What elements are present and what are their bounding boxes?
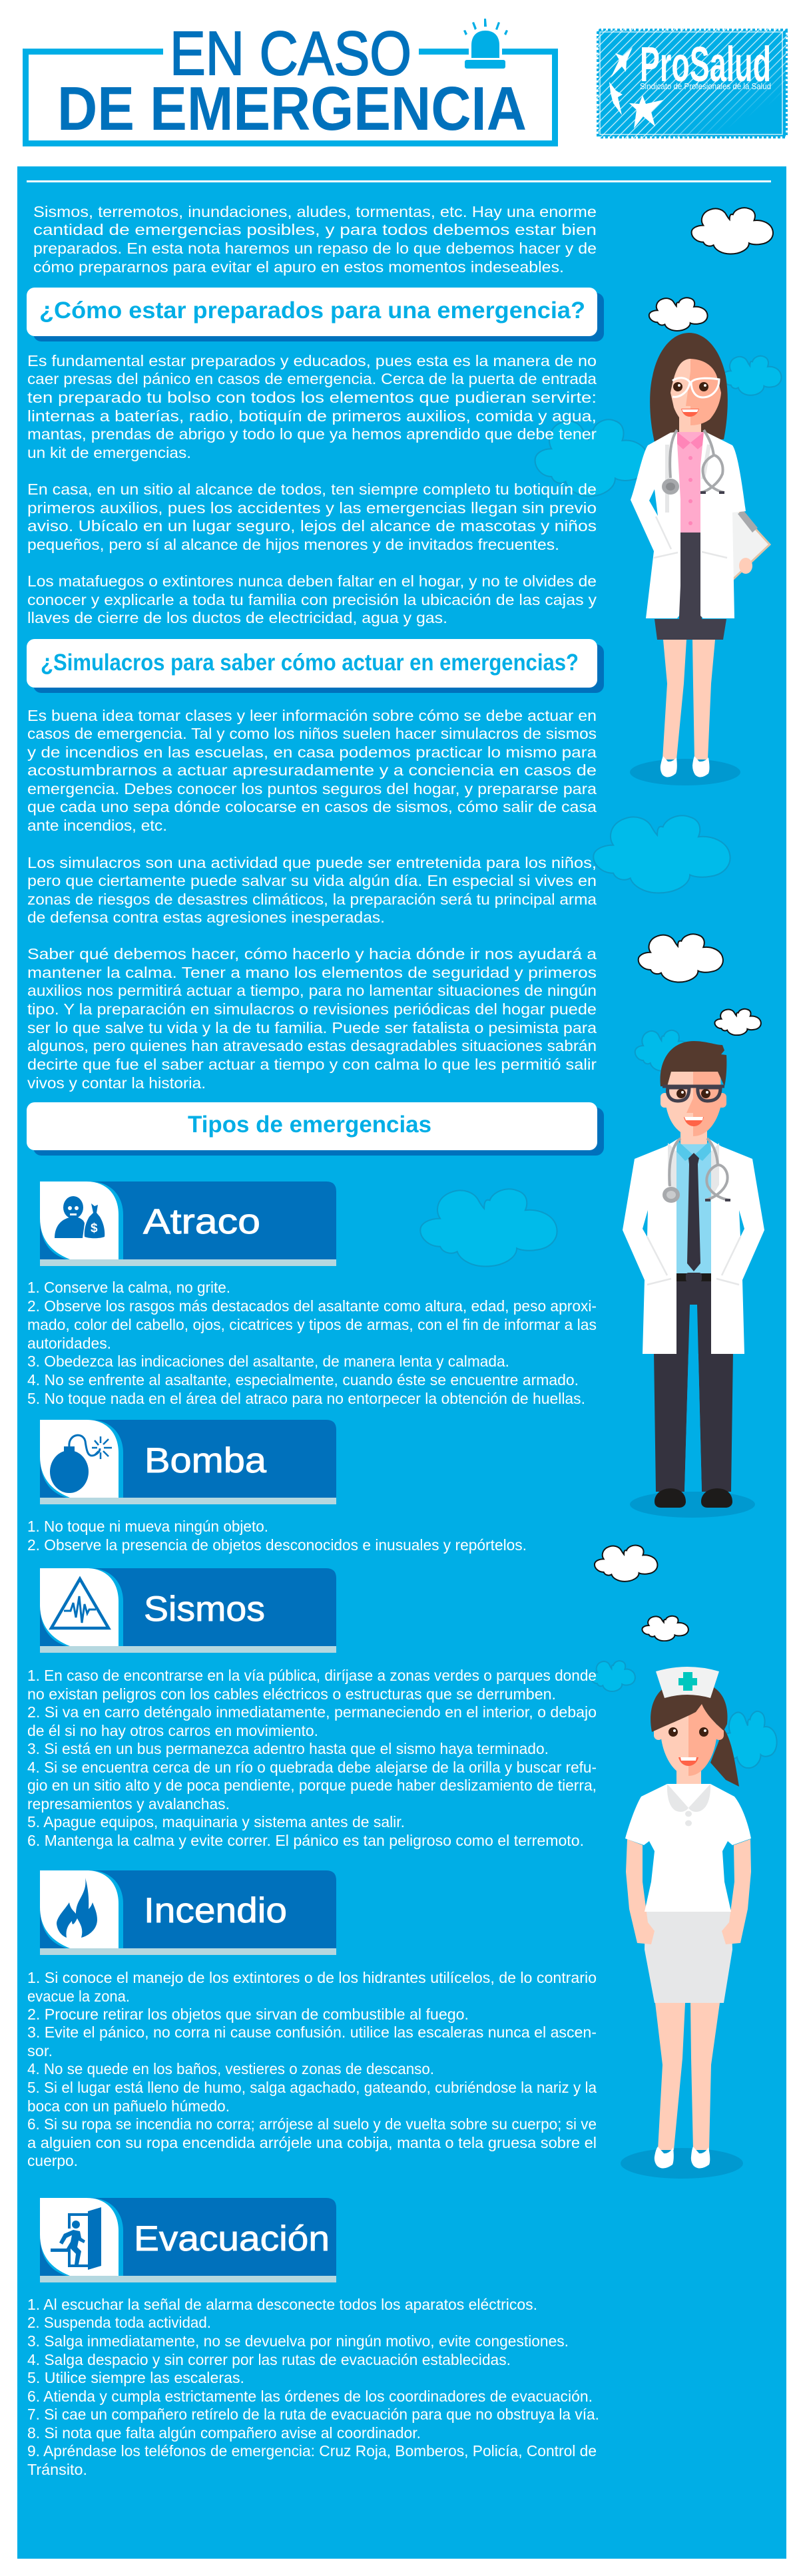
list: evacuacion: 4. Salga despacio y sin correr por las rutas de evacuación establecidas. (27, 2351, 511, 2368)
text block: simulacros paragraph 3: Saber qué debemos hacer, cómo hacerlo y hacia dónde ir nos ayudará a (27, 945, 597, 963)
list: incendio: evacue la zona. (27, 1988, 130, 2005)
text block: preparados paragraph 3: llaves de cierre de los ductos de electricidad, agua y gas. (27, 609, 447, 626)
cloud: blue beside atraco (420, 1189, 557, 1267)
text block: intro (33, 203, 597, 276)
list: evacuacion: 6. Atienda y cumpla estrictamente las órdenes de los coordinadores de evacuación. (27, 2388, 593, 2405)
list: evacuacion: 5. Utilice siempre las escaleras. (27, 2369, 244, 2386)
list: incendio: 2. Procure retirar los objetos que sirvan de combustible al fuego. (27, 2006, 469, 2023)
text block: preparados paragraph 1 (27, 352, 597, 461)
cloud: white small (714, 1009, 761, 1035)
list: evacuacion: 9. Apréndase los teléfonos de emergencia: Cruz Roja, Bomberos, Policía, Control de (27, 2442, 597, 2460)
text block: preparados paragraph 1: un kit de emergencias. (27, 444, 191, 461)
text block: simulacros paragraph 3: algunos, pero quienes han atravesado estas desagradables situaciones sabrán (27, 1037, 597, 1054)
text block: preparados paragraph 1: mantas, prendas de abrigo y todo lo que ya hemos aprendido que debe tener (27, 425, 597, 443)
text block: simulacros paragraph 3: ser lo que salve tu vida y la de tu familia. Puede ser fatalista o pesimista para (27, 1019, 597, 1036)
heading: tipos de emergencias (27, 1102, 604, 1156)
text block: simulacros paragraph 3: tipo. Y la preparación en simulacros o revisiones periódicas del hogar puede (27, 1000, 597, 1018)
text block: preparados paragraph 3: conocer y explicarle a toda tu familia con precisión la ubicación de las cajas y (27, 591, 597, 608)
cloud: white above woman (649, 298, 708, 331)
text block: simulacros paragraph 1: casos de emergencia. Tal y como los niños suelen hacer simulacros de sismos (27, 725, 597, 742)
text block: intro: preparados. En esta nota haremos un repaso de lo que debemos hacer y de (33, 240, 597, 257)
text block: intro: Sismos, terremotos, inundaciones, aludes, tormentas, etc. Hay una enorme (33, 203, 597, 220)
banner: bomba (40, 1420, 336, 1504)
heading: simulacros (27, 639, 604, 693)
list: sismos: no existan peligros con los cables eléctricos o estructuras que se derrumben. (27, 1685, 556, 1703)
list: incendio: sor. (27, 2042, 53, 2059)
logo: ProSalud (597, 29, 788, 138)
text block: simulacros paragraph 2: de defensa contra estas agresiones inesperadas. (27, 909, 385, 926)
icon: exit door and runner (51, 2207, 101, 2270)
text block: preparados paragraph 2: En casa, en un sitio al alcance de todos, ten siempre completo tu botiquín de (27, 481, 597, 498)
icon: robber with money bag: $ (91, 1221, 98, 1235)
heading: como estar preparados: ¿Cómo estar preparados para una emergencia? (39, 298, 585, 323)
text block: simulacros paragraph 1: emergencia. Debes conocer los puntos seguros del hogar, y prepararse para (27, 780, 597, 797)
text block: simulacros paragraph 2 (27, 854, 597, 926)
list: bomba: 1. No toque ni mueva ningún objeto. (27, 1518, 268, 1535)
list: sismos: de él si no hay otros carros en movimiento. (27, 1722, 318, 1739)
banner: evacuacion (40, 2198, 336, 2282)
text block: preparados paragraph 1: caer presas del pánico en casos de emergencia. Cerca de la puerta de entrada (27, 370, 597, 387)
text block: simulacros paragraph 1: que cada uno sepa dónde colocarse en casos de sismos, cómo salir de casa (27, 798, 597, 815)
list: incendio: 6. Si su ropa se incendia no corra; arrójese al suelo y de vuelta sobre su cuerpo; si ve (27, 2115, 597, 2133)
list: evacuacion: 2. Suspenda toda actividad. (27, 2314, 211, 2331)
text block: preparados paragraph 3: Los matafuegos o extintores nunca deben faltar en el hogar, y no te olvides de (27, 572, 597, 590)
text block: simulacros paragraph 2: pero que ciertamente puede salvar su vida algún día. En especial si vives en (27, 872, 597, 889)
text block: simulacros paragraph 1: Es buena idea tomar clases y leer información sobre cómo se debe actuar en (27, 707, 597, 724)
list: evacuacion: 7. Si cae un compañero retírelo de la ruta de evacuación para que no obstruya la vía. (27, 2406, 599, 2423)
cloud: blue behind man head (635, 1030, 692, 1071)
list: sismos (27, 1667, 597, 1849)
cloud: blue near nurse cap (591, 1661, 635, 1691)
text block: simulacros paragraph 1: y de incendios en las escuelas, en casa podemos practicar lo mismo para (27, 744, 597, 761)
heading: simulacros: ¿Simulacros para saber cómo actuar en emergencias? (41, 650, 579, 676)
list: incendio: boca con un pañuelo húmedo. (27, 2097, 230, 2115)
list: sismos: 1. En caso de encontrarse en la vía pública, diríjase a zonas verdes o parques donde (27, 1667, 597, 1684)
list: incendio: a alguien con su ropa encendida arrójele una cobija, manta o tela gruesa sobre el (27, 2134, 597, 2151)
list: atraco: 5. No toque nada en el área del atraco para no entorpecer la obtención de huellas. (27, 1390, 585, 1407)
text block: simulacros paragraph 3: decirte que fue el saber actuar a tiempo y con calma lo que les permitió salir (27, 1056, 597, 1073)
list: atraco: mado, color del cabello, ojos, cicatrices y tipos de armas, con el fin de informar a las (27, 1316, 597, 1333)
banner: incendio: Incendio (144, 1891, 287, 1930)
list: atraco (27, 1279, 597, 1407)
text block: simulacros paragraph 1 (27, 707, 597, 834)
icon: siren (463, 19, 508, 69)
cloud: blue behind woman head (722, 356, 782, 395)
cloud: white lower small (642, 1616, 688, 1641)
text block: simulacros paragraph 1: ante incendios, etc. (27, 817, 167, 834)
icon: flame (57, 1878, 97, 1938)
list: sismos: 4. Si se encuentra cerca de un río o quebrada debe alejarse de la orilla y buscar refu- (27, 1759, 597, 1776)
cloud: white top right (692, 208, 773, 254)
list: evacuacion: 8. Si nota que falta algún compañero avise al coordinador. (27, 2424, 421, 2442)
cloud: blue behind nurse (722, 1711, 777, 1768)
text block: simulacros paragraph 3: vivos y contar la historia. (27, 1074, 206, 1092)
text block: preparados paragraph 2: pequeños, pero sí al alcance de hijos menores y de invitados frecuentes. (27, 536, 559, 553)
text block: preparados paragraph 1: ten preparado tu bolso con todos los elementos que pudieran servirte: (27, 389, 597, 406)
icon: seismic triangle (51, 1579, 109, 1628)
list: incendio (27, 1969, 597, 2169)
list: atraco: 2. Observe los rasgos más destacados del asaltante como altura, edad, peso aproxi- (27, 1297, 597, 1315)
cloud: blue middle (593, 815, 730, 893)
text block: simulacros paragraph 2: Los simulacros son una actividad que puede ser entretenida para los niños, (27, 854, 597, 871)
list: incendio: 4. No se quede en los baños, vestieres o zonas de descanso. (27, 2060, 434, 2077)
text block: simulacros paragraph 3 (27, 945, 597, 1092)
text block: preparados paragraph 2: primeros auxilios, pues los accidentes y las emergencias llegan sin previo (27, 499, 597, 517)
banner: evacuacion: Evacuación (134, 2219, 330, 2258)
illustration: nurse (621, 1667, 751, 2179)
icon: bomb (50, 1435, 112, 1493)
text block: simulacros paragraph 3: mantener la calma. Tener a mano los elementos de seguridad y primeros (27, 964, 597, 981)
logo: ProSalud: Sindicato de Profesionales de la Salud (640, 81, 771, 91)
title: de emergencia: DE EMERGENCIA (57, 74, 527, 143)
list: atraco: 3. Obedezca las indicaciones del asaltante, de manera lenta y calmada. (27, 1353, 509, 1370)
list: sismos: 5. Apague equipos, maquinaria y sistema antes de salir. (27, 1813, 405, 1830)
list: atraco: 1. Conserve la calma, no grite. (27, 1279, 230, 1296)
text block: preparados paragraph 3 (27, 572, 597, 626)
banner: sismos (40, 1568, 336, 1653)
icon: robber with money bag (55, 1196, 105, 1238)
list: evacuacion: 1. Al escuchar la señal de alarma desconecte todos los aparatos eléctricos. (27, 2296, 537, 2313)
list: sismos: represamientos y avalanchas. (27, 1795, 230, 1813)
heading: como estar preparados (27, 288, 604, 341)
illustration: male doctor (623, 1041, 764, 1518)
heading: tipos de emergencias: Tipos de emergencias (188, 1112, 431, 1138)
cloud: blue behind text (535, 419, 649, 497)
title: en caso: EN CASO (170, 19, 411, 88)
list: sismos: 3. Si está en un bus permanezca adentro hasta que el sismo haya terminado. (27, 1740, 549, 1757)
text block: simulacros paragraph 1: acostumbrarnos a actuar apresuradamente y a conciencia en casos de (27, 761, 597, 779)
cloud: white lower (595, 1546, 657, 1582)
list: incendio: 1. Si conoce el manejo de los extintores o de los hidrantes utilícelos, de lo contrario (27, 1969, 597, 1986)
text block: preparados paragraph 2 (27, 481, 597, 553)
list: incendio: cuerpo. (27, 2152, 78, 2169)
list: sismos: gio en un sitio alto y de poca pendiente, porque puede haber deslizamiento de tierra, (27, 1777, 597, 1794)
text block: preparados paragraph 2: aviso. Ubícalo en un lugar seguro, lejos del alcance de mascotas y niños (27, 517, 597, 535)
cloud: white middle (639, 934, 723, 982)
list: bomba: 2. Observe la presencia de objetos desconocidos e inusuales y repórtelos. (27, 1536, 527, 1554)
illustration: woman doctor (630, 333, 770, 785)
banner: sismos: Sismos (144, 1590, 265, 1629)
text block: preparados paragraph 1: linternas a baterías, radio, botiquín de primeros auxilios, comida y agua, (27, 407, 597, 425)
text block: intro: cómo prepararnos para evitar el apuro en estos momentos indeseables. (33, 258, 564, 276)
list: atraco: autoridades. (27, 1335, 111, 1352)
text block: intro: cantidad de emergencias posibles, y para todos debemos estar bien (33, 221, 597, 238)
text block: simulacros paragraph 3: auxilios nos permitirá actuar a tiempo, para no lamentar situaciones de ningún (27, 982, 597, 999)
banner: incendio (40, 1870, 336, 1955)
list: evacuacion (27, 2296, 599, 2478)
list: sismos: 2. Si va en carro deténgalo inmediatamente, permaneciendo en el interior, o debajo (27, 1703, 597, 1721)
text block: simulacros paragraph 2: zonas de riesgos de desastres climáticos, la preparación será tu principal arma (27, 891, 597, 908)
list: evacuacion: 3. Salga inmediatamente, no se devuelva por ningún motivo, evite congestiones. (27, 2332, 569, 2350)
list: bomba (27, 1518, 527, 1554)
title frame (25, 52, 555, 144)
list: evacuacion: Tránsito. (27, 2461, 87, 2478)
banner: atraco (40, 1181, 336, 1266)
list: incendio: 5. Si el lugar está lleno de humo, salga agachado, gateando, cubriéndose la nariz y la (27, 2079, 597, 2096)
banner: atraco: Atraco (143, 1202, 260, 1241)
text block: preparados paragraph 1: Es fundamental estar preparados y educados, pues esta es la manera de no (27, 352, 597, 369)
list: atraco: 4. No se enfrente al asaltante, especialmente, cuando éste se encuentre armado. (27, 1371, 579, 1389)
banner: bomba: Bomba (144, 1441, 267, 1480)
list: sismos: 6. Mantenga la calma y evite correr. El pánico es tan peligroso como el terremoto. (27, 1832, 584, 1849)
list: incendio: 3. Evite el pánico, no corra ni cause confusión. utilice las escaleras nunca el ascen- (27, 2024, 597, 2041)
